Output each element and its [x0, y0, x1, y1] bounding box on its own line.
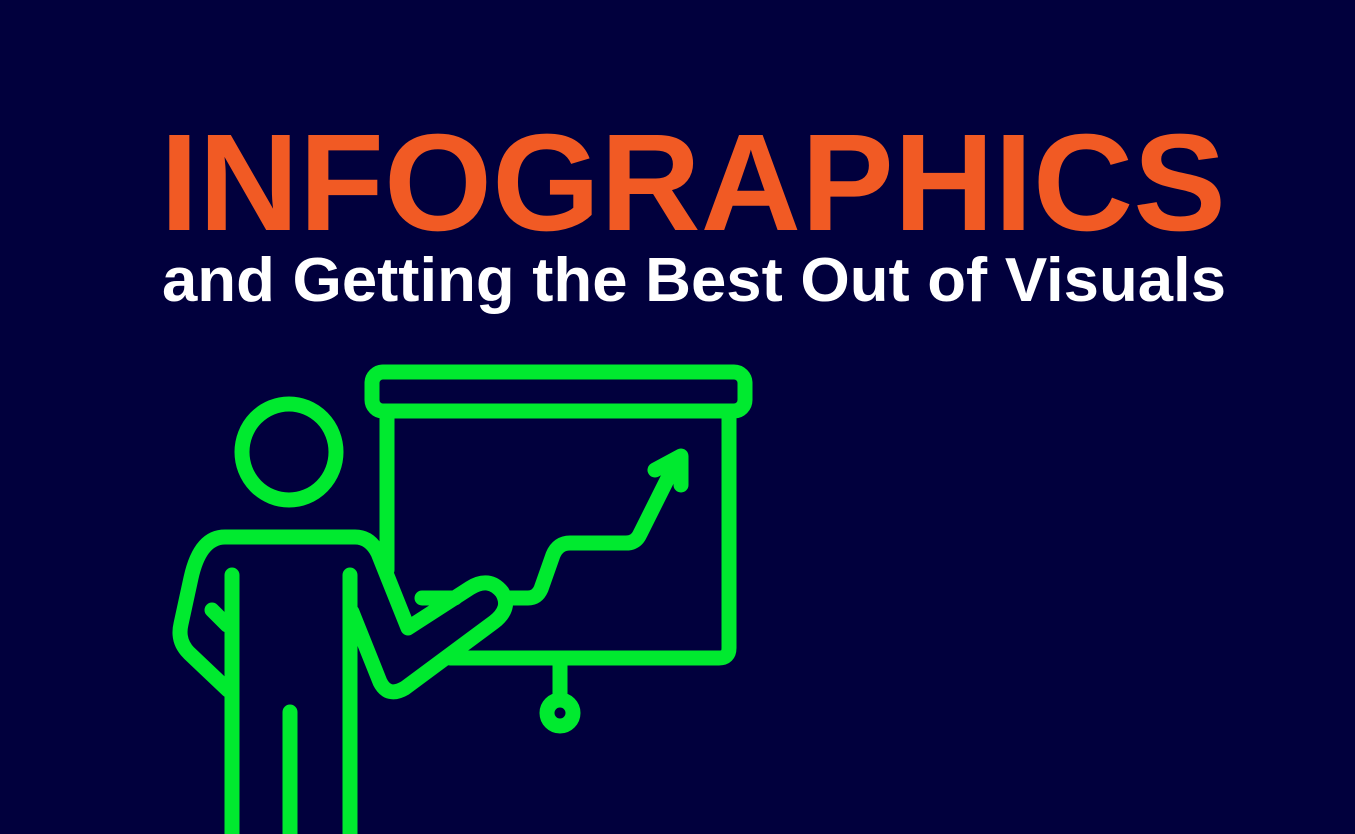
subtitle: and Getting the Best Out of Visuals	[162, 246, 1226, 315]
left hand tick	[212, 610, 227, 625]
title: INFOGRAPHICS	[160, 106, 1226, 260]
screen body	[387, 411, 729, 658]
chart arrow	[510, 456, 681, 598]
hand pointer	[422, 590, 455, 606]
screen stand	[547, 658, 573, 726]
legs	[232, 575, 350, 834]
icon: presenter with chart	[180, 372, 745, 834]
body and arm	[180, 537, 506, 692]
head	[242, 404, 336, 500]
screen top bar	[372, 372, 745, 411]
